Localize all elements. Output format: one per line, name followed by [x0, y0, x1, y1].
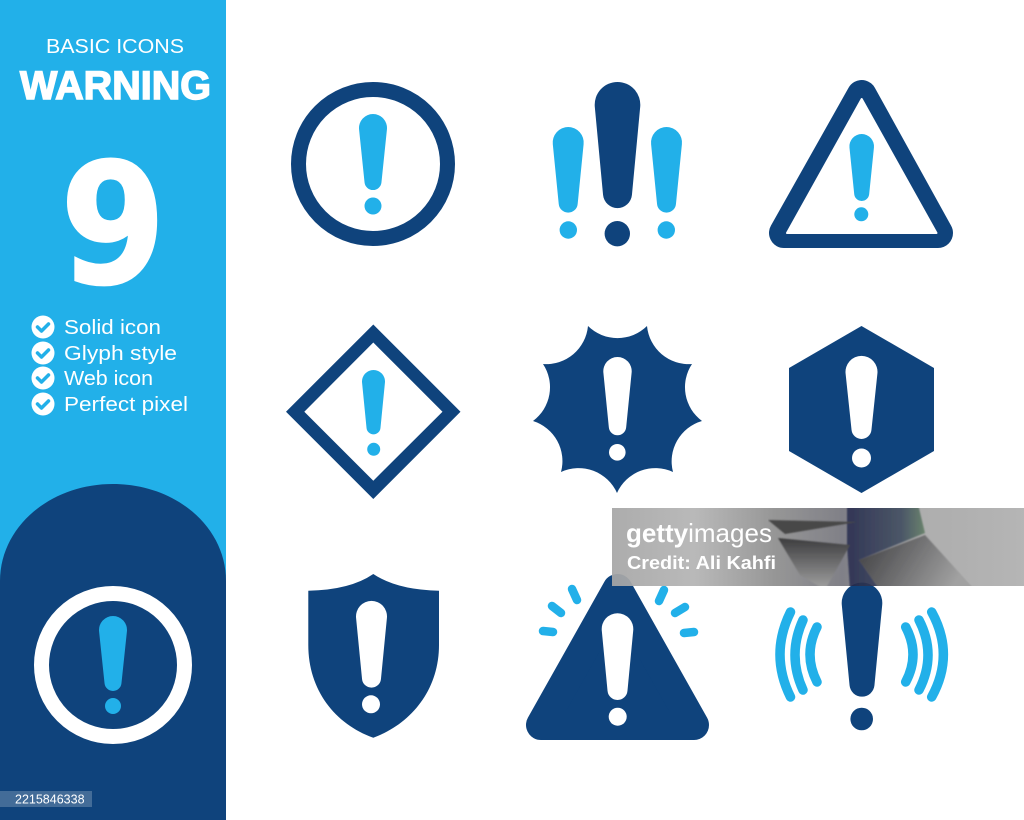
check item: web icon [32, 366, 153, 390]
check item: solid icon [32, 316, 161, 339]
icon: vibrating exclamation [780, 583, 943, 730]
icon: hexagon warning [789, 326, 934, 493]
stock id label [0, 791, 92, 807]
icon: sidebar circle warning [42, 594, 184, 736]
check item: solid icon: Solid icon [64, 317, 161, 339]
watermark banner [612, 500, 1024, 590]
icon: circle warning [298, 90, 448, 238]
vibration arcs [780, 612, 943, 697]
subtitle: basic icons: BASIC ICONS [46, 36, 184, 58]
watermark logo text: gettyimages [626, 518, 772, 548]
alert rays [543, 589, 694, 633]
dark arch panel [0, 484, 226, 820]
check item: perfect pixel [32, 392, 188, 416]
stock id label: 2215846338 [15, 792, 85, 806]
icon: triangle alert with rays [541, 589, 694, 726]
check item: perfect pixel: Perfect pixel [64, 394, 188, 416]
icon: triple exclamation [553, 82, 682, 246]
feature checklist [32, 316, 188, 416]
check item: web icon: Web icon [64, 368, 153, 390]
icon: burst warning [533, 326, 702, 493]
sidebar panel [0, 0, 226, 820]
check item: glyph style [32, 342, 177, 365]
heading: warning: WARNING [20, 64, 211, 108]
icon: shield warning [308, 574, 439, 738]
check item: glyph style: Glyph style [64, 343, 177, 365]
watermark credit: Credit: Ali Kahfi [627, 553, 776, 573]
big number 9: 9 [60, 127, 166, 323]
icon: triangle warning [784, 95, 938, 233]
icon: diamond warning [286, 324, 460, 499]
